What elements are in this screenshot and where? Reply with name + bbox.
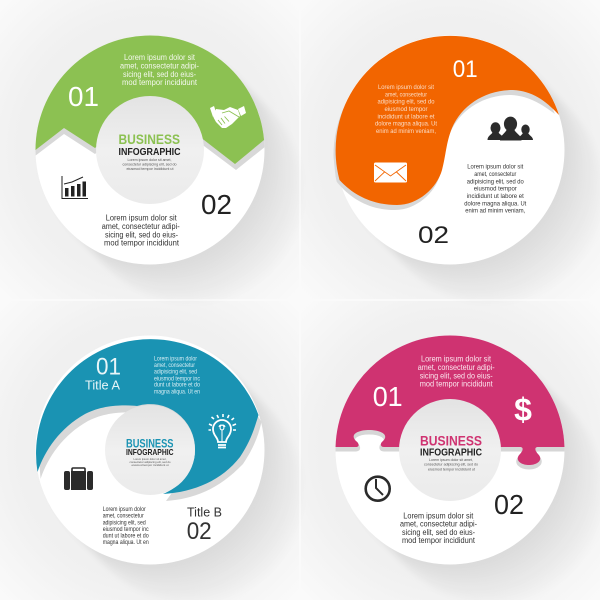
text block 02: Lorem ipsum dolor sit bbox=[403, 511, 474, 520]
number 01 and Title A: Title A bbox=[85, 378, 120, 392]
text block 02: mod tempor incididunt bbox=[402, 536, 476, 545]
panel: blue swirl circle bbox=[36, 336, 290, 590]
orange segment bbox=[336, 36, 559, 205]
center heading: consectetur adipiscing elit, sed do bbox=[130, 460, 171, 464]
center heading: Lorem ipsum dolor sit amet, bbox=[134, 457, 167, 461]
text block 01: dolore magna aliqua. Ut bbox=[375, 121, 437, 128]
center heading: INFOGRAPHIC bbox=[118, 146, 181, 158]
text block 01: adipisicing elit, sed bbox=[154, 369, 197, 376]
center heading: eiusmod tempor incididunt ut bbox=[428, 466, 476, 471]
icon: envelope bbox=[374, 162, 407, 182]
text block 02 bbox=[102, 214, 180, 248]
number 01: 01 bbox=[373, 381, 403, 412]
text block 02: mod tempor incididunt bbox=[104, 239, 180, 248]
text block 01: amet, consectetur bbox=[385, 91, 427, 98]
text block 02: magna aliqua. Ut en bbox=[103, 539, 149, 546]
center heading: BUSINESS bbox=[126, 439, 174, 451]
center heading: consectetur adipiscing elit, sed do bbox=[424, 461, 478, 466]
text block 01: eiusmod tempor bbox=[384, 106, 428, 113]
text block 01: dunt ut labore et do bbox=[154, 382, 200, 389]
center heading bbox=[118, 131, 181, 171]
center heading: BUSINESS bbox=[420, 432, 482, 448]
text block 02: amet, consectetur bbox=[474, 171, 516, 178]
text block 02: amet, consectetur adipi- bbox=[400, 520, 477, 529]
text block 01: sicing elit, sed do eius- bbox=[123, 70, 196, 79]
text block 01: amet, consectetur bbox=[154, 362, 195, 369]
icon: clock bbox=[366, 477, 390, 501]
number 01 and Title A bbox=[85, 354, 121, 392]
text block 01: sicing elit, sed do eius- bbox=[420, 371, 493, 380]
center heading: eiusmod tempor incididunt ut bbox=[126, 166, 174, 171]
center heading: INFOGRAPHIC bbox=[420, 447, 482, 459]
center heading: consectetur adipiscing elit, sed do bbox=[122, 162, 176, 166]
text block 02: dolore magna aliqua. Ut bbox=[464, 200, 527, 207]
text block 02: Lorem ipsum dolor sit bbox=[467, 164, 524, 171]
text block 01 bbox=[120, 53, 199, 87]
text block 01: Lorem ipsum dolor bbox=[154, 355, 197, 362]
text block 01: amet, consectetur adipi- bbox=[120, 62, 199, 70]
text block 02: incididunt ut labore et bbox=[467, 193, 524, 200]
icon: light bulb bbox=[208, 414, 236, 448]
blue segment bbox=[36, 339, 259, 494]
text block 02: amet, consectetur bbox=[103, 513, 144, 520]
magenta segment bbox=[336, 336, 564, 465]
number 02: 02 bbox=[201, 189, 232, 220]
text block 02: adipisicing elit, sed do bbox=[467, 178, 524, 185]
panel: orange yin-yang circle bbox=[334, 36, 590, 290]
center heading bbox=[420, 432, 482, 471]
center heading: eiusmod tempor incididunt ut bbox=[132, 463, 169, 467]
center heading: BUSINESS bbox=[118, 131, 180, 147]
Title B and number 02 bbox=[187, 505, 222, 545]
text block 01: Lorem ipsum dolor sit bbox=[124, 53, 196, 62]
green segment bbox=[36, 36, 264, 164]
text block 02: sicing elit, sed do eius- bbox=[402, 528, 475, 537]
center circle bbox=[105, 405, 195, 495]
text block 01: Lorem ipsum dolor sit bbox=[378, 84, 434, 91]
icon: briefcase bbox=[64, 468, 93, 490]
number 02: 02 bbox=[418, 222, 449, 249]
center heading: INFOGRAPHIC bbox=[126, 447, 174, 457]
text block 01: adipisicing elit, sed do bbox=[378, 99, 435, 106]
text block 02: eiusmod tempor inc bbox=[103, 526, 149, 533]
center circle bbox=[96, 96, 204, 204]
text block 02: sicing elit, sed do eius- bbox=[105, 230, 178, 239]
text block 02: amet, consectetur adipi- bbox=[102, 222, 180, 231]
text block 01: incididunt ut labore et bbox=[378, 113, 435, 120]
text block 02: enim ad minim veniam, bbox=[465, 208, 526, 215]
text block 01: Lorem ipsum dolor sit bbox=[421, 355, 492, 364]
number 01: 01 bbox=[453, 56, 478, 83]
text block 02: Lorem ipsum dolor sit bbox=[106, 214, 177, 223]
text block 01: amet, consectetur adipi- bbox=[418, 363, 495, 372]
center heading: Lorem ipsum dolor sit amet, bbox=[429, 457, 473, 462]
number 01 and Title A: 01 bbox=[96, 354, 121, 380]
text block 01 bbox=[154, 355, 200, 395]
panel: magenta puzzle circle bbox=[336, 336, 600, 600]
number 02: 02 bbox=[494, 489, 524, 520]
text block 01: mod tempor incididunt bbox=[420, 380, 493, 389]
center heading: Lorem ipsum dolor sit amet, bbox=[128, 157, 172, 162]
text block 01 bbox=[375, 84, 437, 135]
text block 01: enim ad minim veniam, bbox=[376, 128, 436, 135]
text block 02 bbox=[464, 164, 527, 215]
Title B and number 02: Title B bbox=[187, 505, 222, 520]
text block 02: adipisicing elit, sed bbox=[103, 519, 146, 526]
text block 01: mod tempor incididunt bbox=[122, 78, 198, 87]
center heading bbox=[126, 439, 174, 467]
text block 02: eiusmod tempor bbox=[474, 186, 517, 193]
text block 02 bbox=[103, 506, 149, 546]
icon: dollar: $ bbox=[514, 392, 532, 428]
icon: bar chart bbox=[62, 176, 88, 198]
text block 01: magna aliqua. Ut en bbox=[154, 388, 200, 395]
text block 01: eiusmod tempor inc bbox=[154, 375, 200, 382]
center circle bbox=[399, 399, 501, 501]
text block 02: Lorem ipsum dolor bbox=[103, 506, 146, 513]
Title B and number 02: 02 bbox=[187, 518, 212, 545]
icon: people bbox=[488, 117, 533, 140]
panel: green arrow circle bbox=[35, 36, 304, 304]
icon: handshake bbox=[210, 106, 246, 128]
text block 01 bbox=[418, 355, 495, 389]
text block 02: dunt ut labore et do bbox=[103, 532, 149, 539]
text block 02 bbox=[400, 511, 477, 545]
number 01: 01 bbox=[68, 81, 99, 112]
